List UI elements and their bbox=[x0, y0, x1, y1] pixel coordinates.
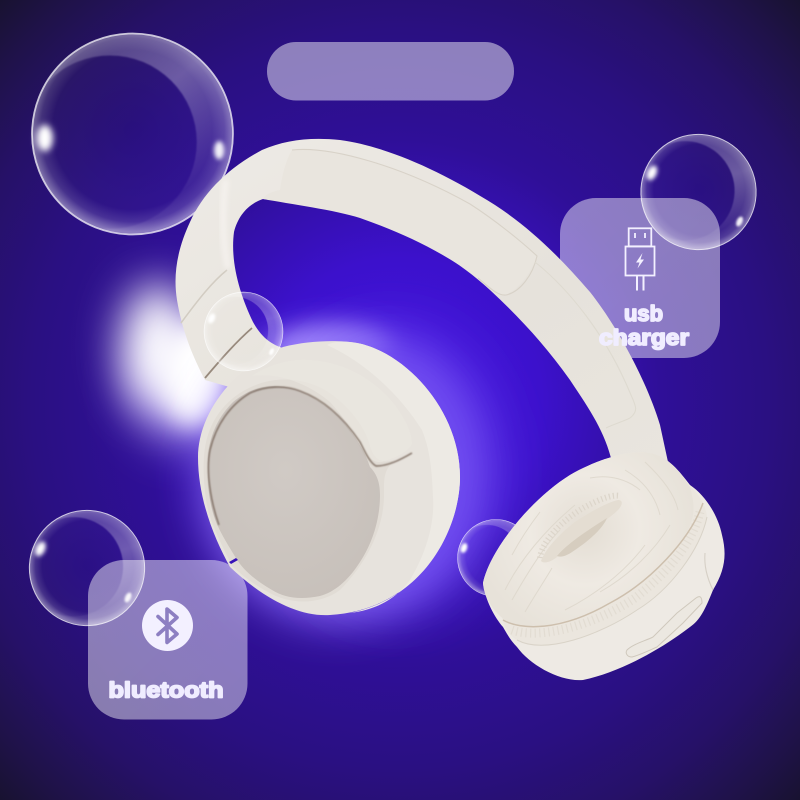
headband bbox=[176, 139, 668, 462]
headband lower seam bbox=[535, 262, 636, 428]
headband inner pad bbox=[263, 149, 537, 295]
right earcup housing bbox=[483, 452, 725, 680]
earcup tab bbox=[252, 360, 412, 462]
icon: bluetooth bbox=[142, 600, 193, 651]
bubble: left over bluetooth panel bbox=[6, 489, 164, 645]
white glow behind headphones bbox=[122, 283, 490, 620]
earcup plate bbox=[208, 386, 380, 598]
bubble: top-right over usb panel bbox=[617, 113, 775, 269]
earcup textured rim bbox=[327, 342, 460, 613]
icon: usb charger bbox=[626, 228, 654, 290]
left earcup housing bbox=[198, 341, 460, 615]
bubble: small over headband bbox=[188, 278, 296, 384]
panel: usb charger bbox=[560, 198, 720, 358]
ear cushion top bbox=[483, 452, 694, 627]
label: usb charger bbox=[599, 301, 689, 350]
plate slit bbox=[208, 387, 412, 525]
top empty pill bbox=[267, 42, 514, 100]
left slider joints bbox=[181, 270, 227, 323]
control buttons bbox=[626, 597, 702, 657]
panel: bluetooth bbox=[88, 560, 248, 720]
cushion inner ridge bbox=[540, 496, 620, 558]
band highlight bbox=[223, 180, 228, 268]
bubble: large top-left bbox=[23, 34, 233, 234]
headphones bbox=[176, 139, 725, 680]
label: bluetooth: bluetooth bbox=[108, 678, 224, 702]
cushion seam bbox=[503, 503, 703, 627]
icon: lightning bolt bbox=[636, 253, 644, 268]
bubble: behind right earcup bbox=[444, 508, 545, 607]
cushion wrinkles bbox=[505, 462, 678, 612]
cushion hole bbox=[541, 500, 622, 562]
label: usb charger: usb bbox=[624, 301, 663, 326]
label: usb charger: charger bbox=[599, 325, 689, 350]
plate outer rim bbox=[204, 380, 395, 602]
bottom gap notch bbox=[229, 558, 238, 564]
ear cushion lower ring bbox=[500, 487, 707, 645]
